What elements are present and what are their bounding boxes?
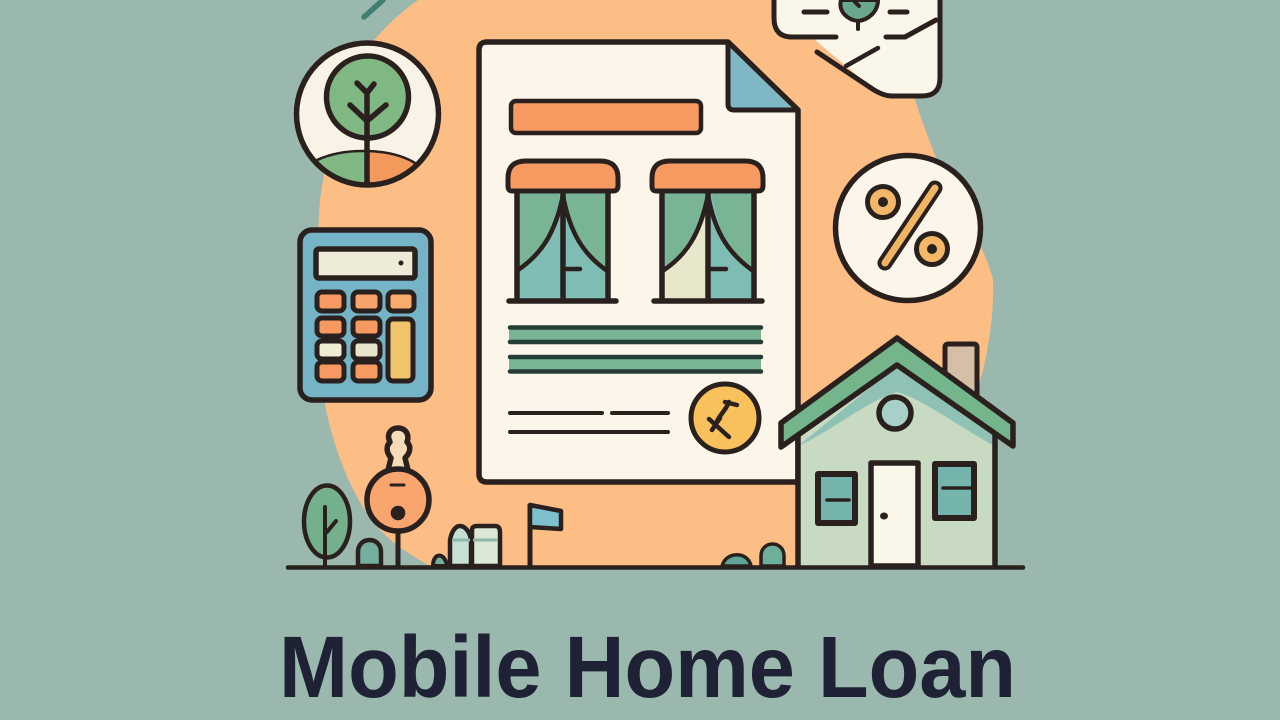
title: Mobile Home Loan [279,619,1016,716]
icon: percent badge [836,156,980,300]
roof [781,338,1013,447]
bush left [358,540,381,566]
ground line [288,565,1023,570]
icon: house [781,338,1013,566]
icon: small tree [304,486,350,566]
right window [935,464,974,518]
icon: calculator [300,230,431,400]
walls [798,362,995,566]
panel: loan document [479,42,798,482]
door [871,463,918,566]
signature lines [510,413,668,432]
chimney [945,344,977,404]
icon: key [367,428,429,566]
left window [508,161,618,301]
icon: pen fragment [364,0,383,17]
heading bar [511,101,701,133]
bushes right [722,544,784,566]
left window [818,474,855,523]
folded corner [728,42,798,110]
icon: tree circle [296,43,438,185]
icon: flag [530,504,561,566]
document sheet [479,42,798,482]
right window [652,161,763,301]
seal [691,384,759,452]
peach blob [317,0,993,567]
green text bars [509,328,761,372]
icon: envelope [774,0,940,96]
icon: small buildings [433,526,500,566]
round window [879,397,911,429]
